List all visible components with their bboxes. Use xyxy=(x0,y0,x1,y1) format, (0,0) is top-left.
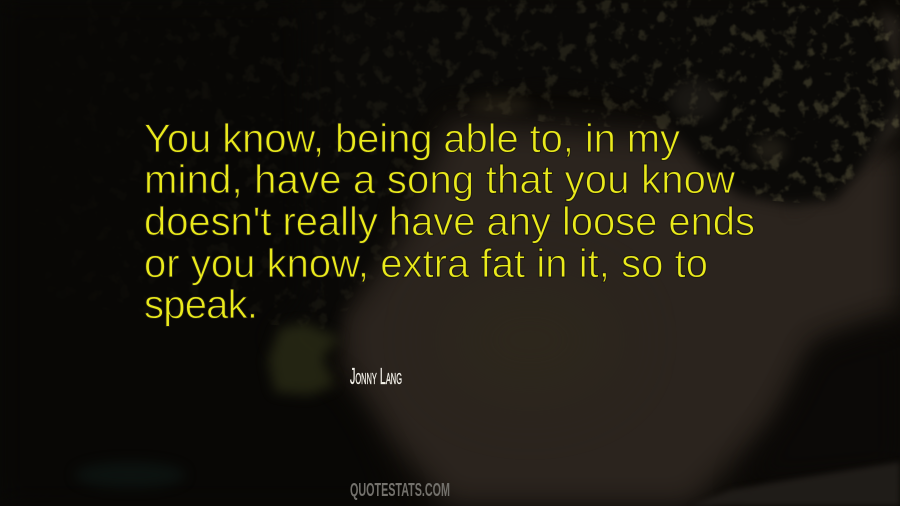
quote text: or you know, extra fat in it, so to xyxy=(144,242,708,286)
background: teal ground tint xyxy=(75,462,185,488)
quote text: mind, have a song that you know xyxy=(144,158,735,202)
background: gravel xyxy=(690,462,900,506)
quote text: speak. xyxy=(144,283,258,327)
quote text: You know, being able to, in my xyxy=(144,117,680,161)
quote text: doesn't really have any loose ends xyxy=(144,200,755,244)
site watermark: QUOTESTATS.COM xyxy=(350,480,450,500)
background: lit path xyxy=(340,120,900,506)
background: green lit shrub xyxy=(268,323,340,395)
background: dark left bushes xyxy=(0,0,400,506)
quote card: Jonny Lang xyxy=(350,363,402,389)
background: upper-right road xyxy=(790,10,900,215)
background: speckled foliage canopy xyxy=(262,0,900,325)
background: tan leaves xyxy=(754,138,786,162)
background: warm glow on path xyxy=(440,280,620,400)
quote text xyxy=(144,117,755,327)
background: dark lower-right shadow xyxy=(740,325,900,485)
